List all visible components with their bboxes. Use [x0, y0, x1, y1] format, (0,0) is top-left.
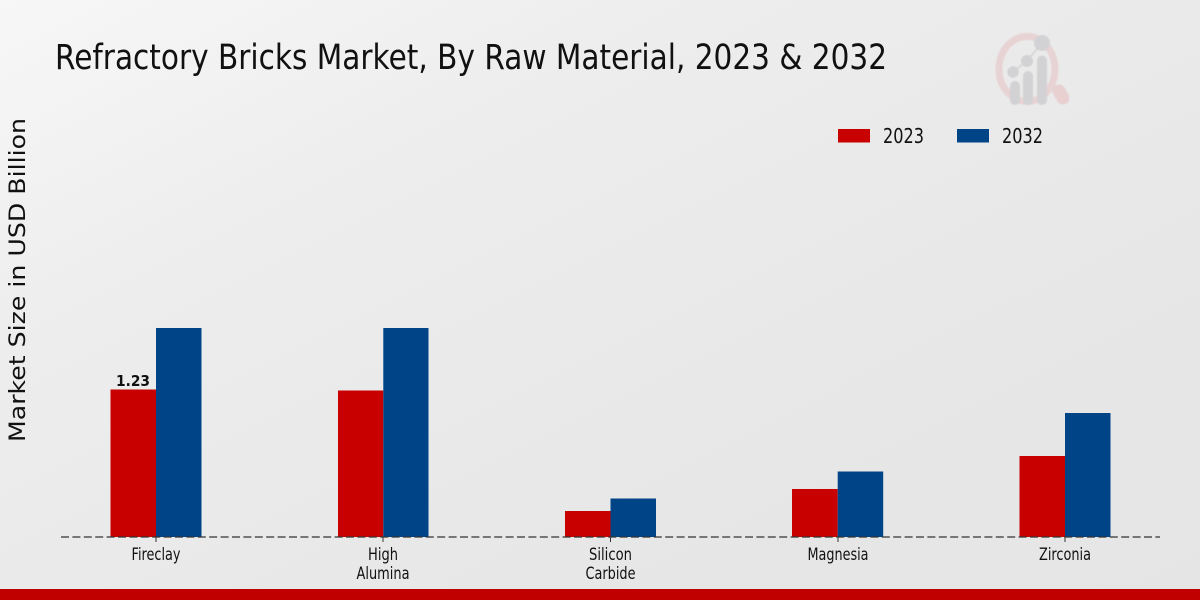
legend label 2032: 2032 — [1002, 124, 1043, 148]
bar chart — [61, 328, 1160, 584]
axis label: Fireclay: Fireclay — [132, 545, 180, 565]
axis label: Silicon Carbide — [586, 545, 636, 584]
bars: Zirconia — [1020, 413, 1110, 537]
axis label: Silicon Carbide: Silicon — [589, 545, 632, 565]
bars: Magnesia — [792, 472, 883, 537]
value label: 1.23 — [116, 372, 150, 390]
axis label: High Alumina: Alumina — [356, 564, 410, 584]
icon: watermark logo — [999, 35, 1063, 105]
legend swatch 2023 — [838, 129, 870, 142]
axis label: High Alumina — [356, 545, 410, 584]
footer bar — [0, 589, 1200, 600]
axis label: High Alumina: High — [368, 545, 398, 565]
legend — [838, 124, 1043, 148]
axis label: Magnesia: Magnesia — [808, 545, 868, 565]
axis label: Zirconia: Zirconia — [1039, 545, 1091, 565]
title: Refractory Bricks Market, By Raw Material, 2023 & 2032 — [55, 38, 887, 78]
y axis title: Market Size in USD Billion — [5, 118, 31, 442]
bars: Silicon Carbide — [565, 498, 656, 537]
bars: High Alumina — [338, 328, 428, 537]
bars: Fireclay — [110, 328, 202, 537]
legend swatch 2032 — [957, 129, 989, 142]
axis label: Silicon Carbide: Carbide — [586, 564, 636, 584]
legend label 2023: 2023 — [883, 124, 924, 148]
